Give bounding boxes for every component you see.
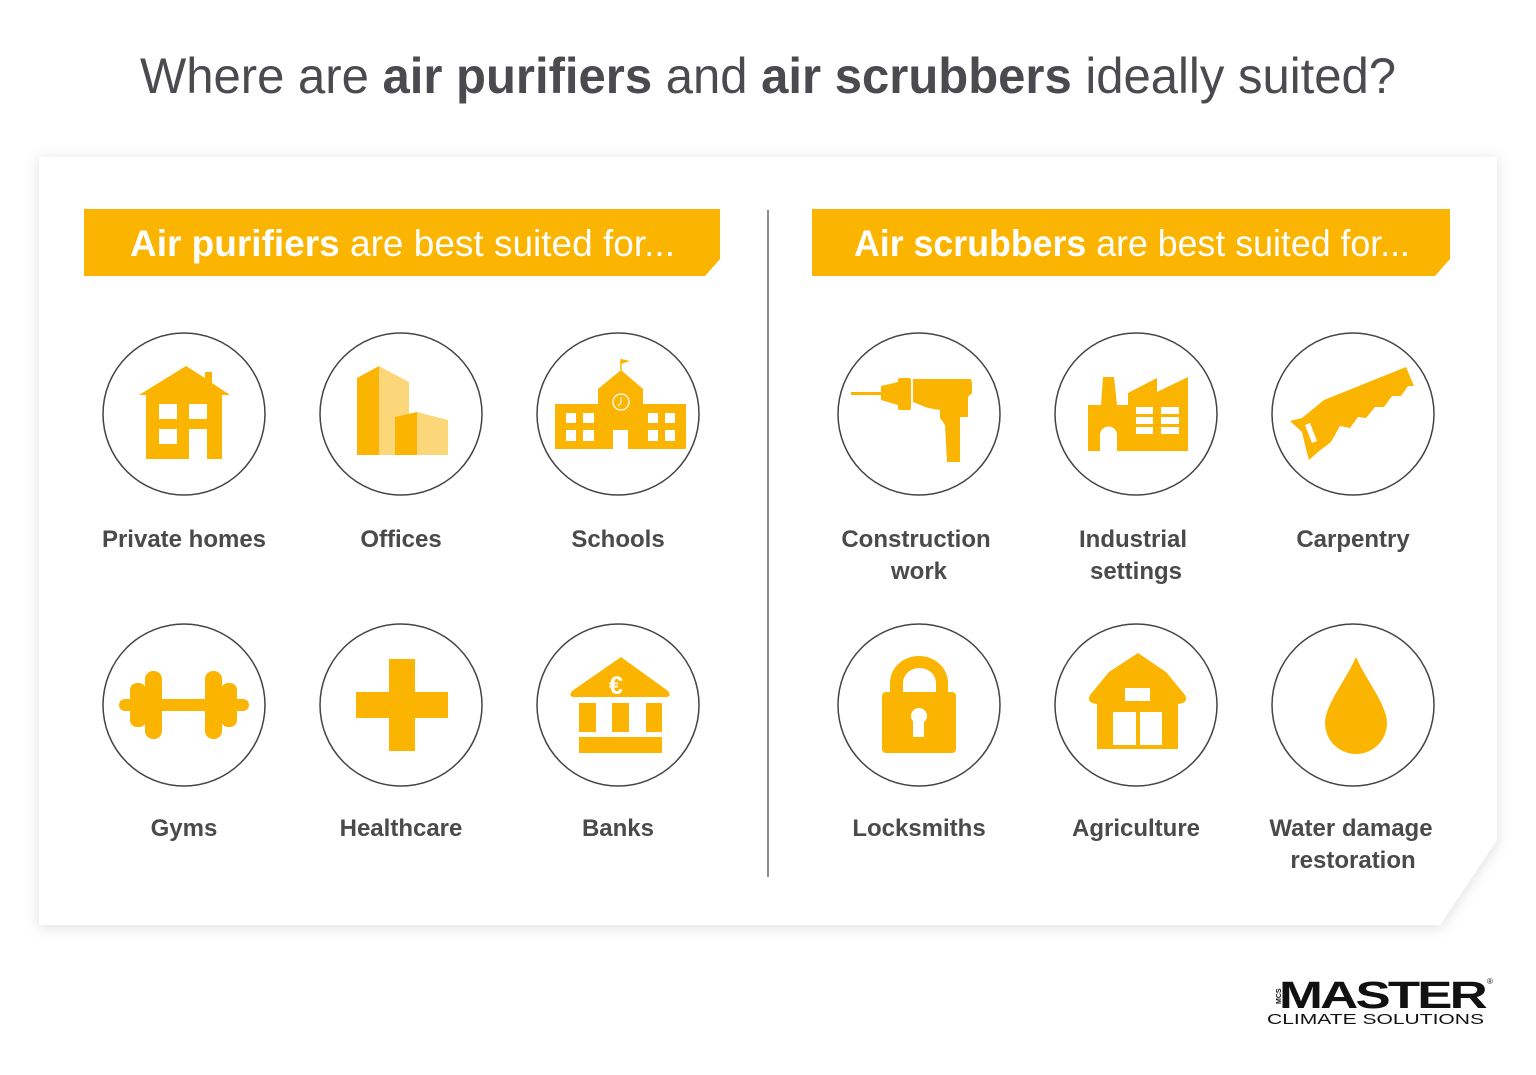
logo: master climate solutions: CLIMATE SOLUTIONS [1267, 1011, 1484, 1028]
banner: air scrubbers [812, 209, 1450, 276]
item: healthcare: Healthcare [340, 815, 462, 842]
item: locksmiths: Locksmiths [852, 815, 986, 842]
icon: cross [356, 659, 448, 751]
logo: master climate solutions: ® [1487, 977, 1493, 986]
item: construction work: work [890, 558, 948, 585]
item: schools: Schools [571, 526, 665, 553]
logo: master climate solutions: MASTER [1279, 975, 1487, 1017]
item: gyms: Gyms [151, 815, 217, 842]
item: carpentry: Carpentry [1296, 526, 1410, 553]
item: agriculture: Agriculture [1072, 815, 1200, 842]
item: industrial settings: settings [1090, 558, 1182, 585]
icon: dumbbell [119, 671, 249, 739]
icon: school [555, 359, 686, 449]
icon: office buildings [357, 366, 448, 455]
item: schools [537, 333, 699, 553]
icon: bank: € [609, 672, 623, 700]
banner: air purifiers: Air purifiers are best suited for... [130, 223, 675, 264]
panel: card [39, 157, 1497, 925]
icon: barn [1089, 653, 1186, 749]
logo: master climate solutions [1267, 975, 1493, 1028]
banner: air scrubbers: Air scrubbers are best suited for... [854, 223, 1410, 264]
item: private homes [102, 333, 266, 553]
item: construction work [838, 333, 1000, 585]
item: water damage restoration [1269, 624, 1434, 874]
item: locksmiths [838, 624, 1000, 842]
icon: saw [1290, 367, 1414, 460]
title: Where are air purifiers and air scrubbers ideally suited? [140, 48, 1396, 104]
item: industrial settings [1055, 333, 1217, 585]
banner: air purifiers [84, 209, 720, 276]
item: agriculture [1055, 624, 1217, 842]
icon: bank [570, 657, 670, 753]
item: banks [537, 624, 699, 842]
item: healthcare [320, 624, 482, 842]
item: gyms [103, 624, 265, 842]
item: construction work: Construction [841, 526, 991, 553]
item: water damage restoration: Water damage [1269, 815, 1433, 842]
item: industrial settings: Industrial [1079, 526, 1187, 553]
icon: house [139, 366, 230, 459]
icon: padlock [882, 656, 956, 753]
icon: drill [851, 378, 972, 462]
icon: water drop [1325, 657, 1387, 754]
item: offices [320, 333, 482, 553]
logo: master climate solutions: MCS [1276, 988, 1283, 1004]
item: private homes: Private homes [102, 526, 266, 553]
icon: factory [1088, 377, 1188, 451]
item: offices: Offices [360, 526, 442, 553]
item: carpentry [1272, 333, 1434, 553]
item: water damage restoration: restoration [1290, 847, 1416, 874]
item: banks: Banks [582, 815, 654, 842]
